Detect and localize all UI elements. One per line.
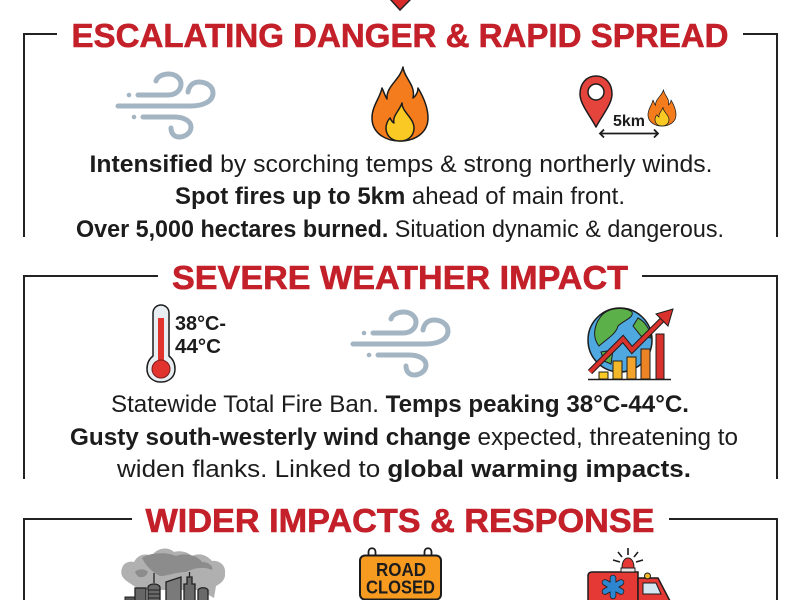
heading: escalating danger: ESCALATING DANGER & RAPID SPREAD <box>72 17 728 54</box>
icon: ambulance <box>588 548 670 600</box>
icon: road closed sign <box>360 548 441 600</box>
text: weather details: Statewide Total Fire Ban. Temps peaking 38°C-44°C. <box>111 391 689 418</box>
text: danger details: Intensified by scorching temps & strong northerly winds. <box>90 151 712 178</box>
icon: road closed sign: CLOSED <box>366 578 435 598</box>
text: danger details <box>76 151 724 243</box>
icon: wind <box>353 312 448 375</box>
icon: top chevron marker <box>390 0 410 10</box>
icon: location pin and 5km spot fire <box>580 76 676 138</box>
heading: wider impacts and response: WIDER IMPACTS & RESPONSE <box>146 502 654 539</box>
icon: globe with rising chart <box>588 308 673 380</box>
icon: thermometer 38-44°C: 44°C <box>175 336 221 358</box>
text: weather details <box>70 391 738 483</box>
icon: flame <box>372 67 428 141</box>
text: weather details: Gusty south-westerly wind change expected, threatening to <box>70 424 738 451</box>
panel: wider impacts and response <box>24 502 777 600</box>
icon: thermometer 38-44°C <box>147 305 226 382</box>
text: weather details: widen flanks. Linked to global warming impacts. <box>116 456 691 483</box>
icon: smoky city <box>121 549 225 600</box>
icon: road closed sign: ROAD <box>376 560 426 580</box>
icon: wind <box>118 74 213 137</box>
text: danger details: Over 5,000 hectares burned. Situation dynamic & dangerous. <box>76 216 724 243</box>
panel: escalating danger and rapid spread <box>24 17 777 243</box>
icon: thermometer 38-44°C: 38°C- <box>175 313 226 335</box>
panel: severe weather impact <box>24 259 777 483</box>
text: danger details: Spot fires up to 5km ahead of main front. <box>175 183 625 210</box>
icon: location pin and 5km spot fire: 5km <box>613 113 645 130</box>
heading: severe weather impact: SEVERE WEATHER IMPACT <box>172 259 628 296</box>
